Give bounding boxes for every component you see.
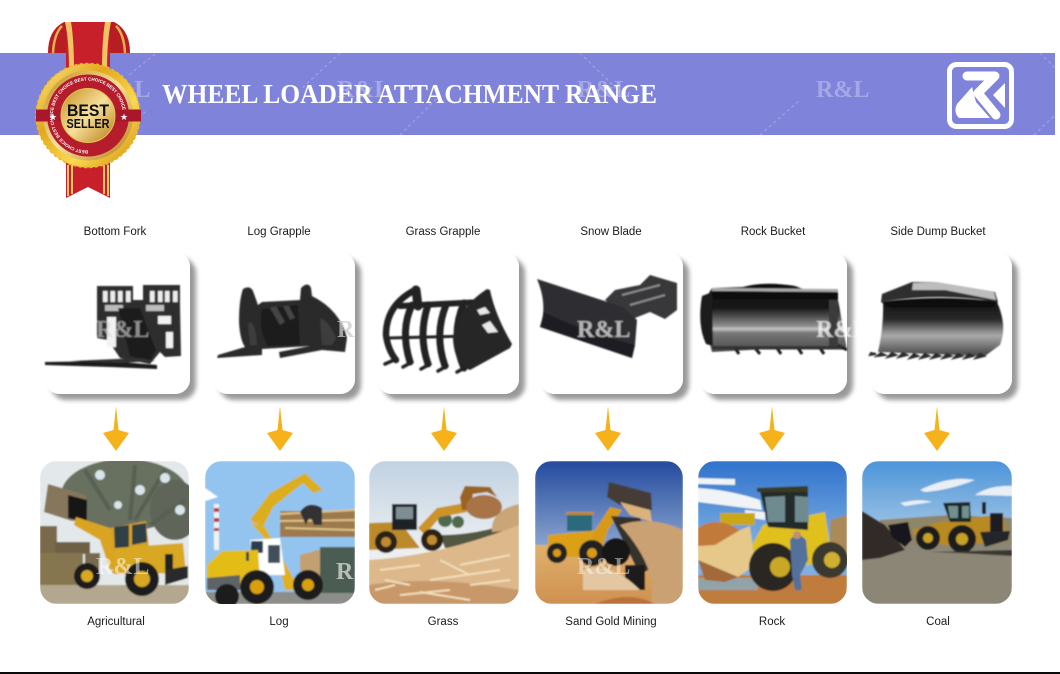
icon: snow blade: R&L xyxy=(577,317,630,343)
ribbon: tail xyxy=(66,160,110,198)
logo xyxy=(950,64,1012,126)
application labels: Coal xyxy=(926,616,950,628)
photo: log xyxy=(205,461,355,604)
icon: grass grapple xyxy=(385,289,512,372)
application labels xyxy=(87,616,950,628)
attachment labels: Grass Grapple xyxy=(406,226,480,238)
banner: R&L xyxy=(337,77,390,103)
seal: ★ xyxy=(120,113,128,123)
application labels: Sand Gold Mining xyxy=(565,616,657,628)
watermark: R&L xyxy=(336,559,389,585)
panel: log grapple: R xyxy=(337,317,355,343)
icon: bottom fork: R&L xyxy=(96,317,149,343)
title: WHEEL LOADER ATTACHMENT RANGE xyxy=(162,79,657,109)
icon: bottom fork xyxy=(45,285,181,369)
banner: R&L xyxy=(816,77,869,103)
banner: R&L xyxy=(97,77,150,103)
photo: grass xyxy=(369,461,519,604)
photo: rock xyxy=(698,461,848,604)
application labels: Rock xyxy=(759,616,785,628)
panel: bottom fork xyxy=(45,252,190,394)
photo: sand gold mining xyxy=(535,461,683,604)
icon: side dump bucket xyxy=(870,282,1003,358)
attachment labels: Log Grapple xyxy=(247,226,311,238)
attachment labels: Rock Bucket xyxy=(741,226,806,238)
panel: snow blade xyxy=(537,252,683,394)
ribbon: top xyxy=(48,22,130,70)
seal: ★ xyxy=(49,113,57,123)
photo: agricultural xyxy=(40,459,200,604)
watermark: R&L xyxy=(96,554,149,580)
panel: rock bucket xyxy=(700,252,869,394)
application labels: Log xyxy=(269,616,289,628)
attachment labels: Snow Blade xyxy=(580,226,642,238)
banner: R&L xyxy=(577,77,630,103)
seal: SELLER xyxy=(66,117,110,131)
best seller badge xyxy=(35,22,141,198)
watermark: R&L xyxy=(577,554,630,580)
application labels: Agricultural xyxy=(87,616,145,628)
application labels: Grass xyxy=(428,616,459,628)
icon: log grapple xyxy=(217,284,347,358)
icon: rock bucket xyxy=(700,284,869,354)
banner xyxy=(0,53,1055,135)
attachment labels xyxy=(84,226,986,238)
seal: BEST xyxy=(67,101,110,120)
icon: snow blade xyxy=(537,275,677,358)
arrows xyxy=(103,406,950,451)
attachment labels: Side Dump Bucket xyxy=(890,226,986,238)
seal xyxy=(35,62,141,168)
panel: side dump bucket xyxy=(870,252,1012,394)
panel: grass grapple xyxy=(377,252,519,394)
photo: coal xyxy=(862,461,1012,604)
panel: log grapple xyxy=(213,252,355,394)
attachment labels: Bottom Fork xyxy=(84,226,147,238)
seal: BEST CHOICE BEST CHOICE BEST CHOICE BEST CHOICE BEST CHOICE xyxy=(50,78,126,154)
icon: rock bucket: R&L xyxy=(816,317,869,343)
